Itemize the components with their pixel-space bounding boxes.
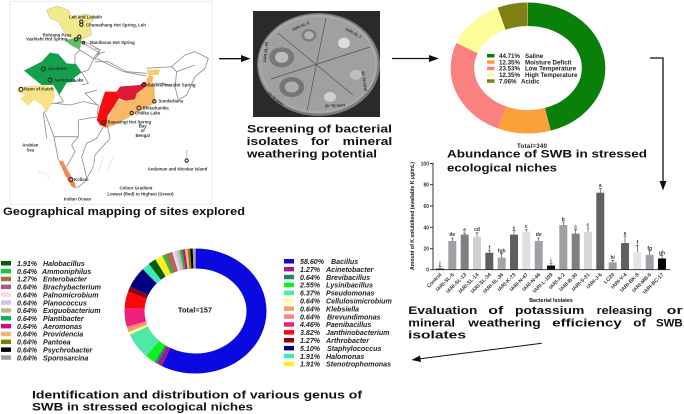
legend: genera right: 2.55% bbox=[299, 282, 321, 290]
chart: potassium solubilisation bars: IARI-SL-34 bbox=[470, 272, 493, 295]
chart: potassium solubilisation bars: c bbox=[574, 224, 577, 230]
legend: genera right: 0.64% bbox=[300, 274, 321, 282]
heading: abundance: ecological niches bbox=[447, 162, 557, 174]
panel: geographical map of India: Chilika Lake bbox=[135, 111, 161, 116]
legend: genera right: 0.64% bbox=[300, 313, 321, 321]
heading: evaluation: Evaluation bbox=[408, 305, 478, 317]
heading: evaluation: releasing bbox=[597, 305, 652, 317]
arrow: plate to donut bbox=[392, 55, 439, 62]
chart: potassium solubilisation bars: e bbox=[463, 228, 466, 234]
legend: genera left: Providencia bbox=[43, 331, 83, 339]
panel: geographical map of India: Andaman and Nicobar Island bbox=[148, 166, 208, 171]
legend: genera left: 1.91% bbox=[17, 260, 38, 268]
legend: genera left: Halobacillus bbox=[43, 260, 85, 268]
chart: potassium solubilisation bars: IARI-SL-36 bbox=[482, 272, 505, 295]
chart: potassium solubilisation bars: c bbox=[587, 222, 590, 228]
panel: geographical map of India: Sea bbox=[26, 147, 35, 152]
chart: potassium solubilisation bars: IARI-N-47 bbox=[509, 272, 530, 293]
panel: geographical map of India: Vashisht Hot Spring bbox=[26, 37, 67, 42]
panel: geographical map of India: Sundarbans bbox=[158, 99, 184, 104]
chart: potassium solubilisation bars: LC20 bbox=[603, 272, 616, 285]
chart: potassium solubilisation bars: IARI-L-109 bbox=[532, 272, 554, 295]
heading: abundance bbox=[447, 149, 647, 174]
chart: potassium solubilisation bars: IARI-SL-14 bbox=[458, 272, 480, 295]
legend: genera left: Planococcus bbox=[43, 299, 87, 307]
legend: stress niches: High Temperature bbox=[525, 72, 578, 79]
legend: genera left: Aeromonas bbox=[42, 323, 82, 331]
heading: evaluation: isolates bbox=[408, 330, 466, 342]
legend: genera right: 5.10% bbox=[300, 345, 321, 353]
legend: genera right: Bacillus bbox=[331, 258, 358, 266]
legend: genera right: 1.91% bbox=[300, 361, 321, 369]
legend: stress niches: Low Temperature bbox=[525, 66, 577, 73]
legend: genera left: 0.64% bbox=[17, 354, 38, 362]
legend: genera left: 0.64% bbox=[17, 268, 38, 276]
chart: potassium solubilisation bars: j bbox=[438, 261, 441, 267]
legend: genera right: Pseudomonas bbox=[326, 290, 375, 298]
chart: genus donut bbox=[134, 258, 256, 364]
legend: stress niches: 44.71% bbox=[499, 53, 520, 60]
heading: identification: SWB in stressed ecological niches bbox=[32, 402, 253, 414]
legend: genera right: Klebsiella bbox=[326, 305, 359, 313]
chart: potassium solubilisation bars: f bbox=[488, 246, 490, 252]
plate labels: IARI-SL-26 bbox=[360, 70, 368, 92]
legend: genera right: Halomonas bbox=[326, 353, 364, 361]
panel: geographical map of India: Kollam bbox=[74, 177, 89, 182]
legend: genera left: Exiguobacterium bbox=[43, 307, 101, 315]
east India and north-east bbox=[95, 48, 208, 129]
chart: potassium solubilisation bars: de bbox=[536, 232, 542, 238]
legend: genera right bbox=[284, 258, 393, 369]
legend: genera right: 1.27% bbox=[300, 337, 321, 345]
chart: potassium solubilisation bars: 0 bbox=[426, 268, 429, 274]
legend: genera left: Ammoniphilus bbox=[41, 268, 91, 276]
legend: genera left: 0.64% bbox=[17, 307, 38, 315]
chart: potassium solubilisation bars: 80 bbox=[423, 183, 429, 189]
chart: potassium solubilisation bars: cd bbox=[474, 227, 480, 233]
arrow: map to plate bbox=[219, 55, 250, 62]
donut total label: Total=340 bbox=[517, 143, 548, 150]
chart: potassium solubilisation bars: fgh bbox=[498, 248, 506, 254]
legend: genera right: 3.82% bbox=[300, 329, 321, 337]
chart: potassium solubilisation bars: i bbox=[550, 258, 552, 264]
legend: genera right: Brevundimonas bbox=[327, 313, 381, 321]
panel: geographical map of India: Bay bbox=[139, 123, 147, 128]
panel: geographical map of India: Rann of Kutch bbox=[24, 87, 54, 92]
legend: genera right: 1.27% bbox=[300, 266, 321, 274]
panel: geographical map of India: Colour Gradient bbox=[120, 186, 153, 191]
legend: genera left: Plantibacter bbox=[43, 315, 85, 323]
legend: genera left: 1.27% bbox=[17, 276, 38, 284]
legend: genera left: 0.64% bbox=[17, 346, 38, 354]
legend: genera left: 0.64% bbox=[17, 315, 38, 323]
legend: genera left: 0.64% bbox=[17, 323, 38, 331]
heading: evaluation: mineral bbox=[408, 318, 455, 330]
panel: petri dish photo bbox=[253, 11, 380, 117]
heading: screening bbox=[246, 124, 392, 160]
legend: genera left: 0.64% bbox=[17, 284, 38, 292]
legend: genera right: 1.91% bbox=[300, 353, 321, 361]
legend: stress niches: 23.53% bbox=[499, 66, 520, 73]
chart: potassium solubilisation bars: IARI-SL-13 bbox=[445, 272, 468, 295]
chart: potassium solubilisation bars: IARI-MB-5 bbox=[631, 272, 653, 294]
legend: genera right: 0.64% bbox=[300, 298, 321, 306]
chart: potassium solubilisation bars: IARI-J-6 bbox=[586, 272, 604, 290]
legend: stress niches: Saline bbox=[525, 53, 544, 60]
panel: geographical map of India: Bayasingi Hot Spring bbox=[107, 120, 151, 125]
chart: potassium solubilisation bars: 40 bbox=[423, 225, 429, 231]
heading: evaluation: potassium bbox=[515, 305, 585, 317]
legend: genera right: 6.37% bbox=[300, 290, 321, 298]
chart: potassium solubilisation bars: de bbox=[449, 232, 455, 238]
heading: screening: Screening of bacterial bbox=[247, 124, 392, 136]
heading: evaluation: SWB bbox=[656, 318, 683, 330]
chart: potassium solubilisation bars bbox=[410, 162, 670, 304]
heading: screening: weathering potential bbox=[246, 148, 377, 160]
chart: potassium solubilisation bars: IARI-S-31 bbox=[571, 272, 591, 293]
legend: genera right: Staphylococcus bbox=[327, 345, 381, 353]
legend: genera right: 0.64% bbox=[300, 305, 321, 313]
chart: abundance donut bbox=[462, 14, 594, 122]
plate labels: IARI-SL-25 bbox=[262, 41, 269, 62]
legend: genera right: 4.46% bbox=[299, 321, 321, 329]
legend: genera right: Cellulosimicrobium bbox=[326, 298, 393, 306]
panel: geographical map of India: Bhitarkanika bbox=[143, 106, 169, 111]
heading: evaluation: of bbox=[488, 305, 504, 317]
legend: stress niches: 7.06% bbox=[499, 78, 517, 85]
plate labels: IARI-SL-27 bbox=[265, 90, 285, 107]
y axis title: Amount of K solubilised (available K µg/mL) bbox=[410, 162, 416, 270]
chart: potassium solubilisation bars: 100 bbox=[421, 162, 429, 168]
legend: genera right: Brevibacillus bbox=[326, 274, 370, 282]
panel: geographical map of India: Jaisalmer bbox=[47, 66, 68, 71]
heading: evaluation: or bbox=[667, 305, 684, 317]
heading: evaluation bbox=[408, 305, 684, 342]
legend: genera left: 0.64% bbox=[17, 331, 38, 339]
panel: geographical map of India: of bbox=[141, 128, 145, 133]
plate labels: IARI-SL-3 bbox=[291, 20, 311, 32]
chart: potassium solubilisation bars: c bbox=[525, 224, 528, 230]
legend: stress niches: 12.35% bbox=[499, 59, 520, 66]
legend: genera left: 0.64% bbox=[17, 339, 38, 347]
chart: potassium solubilisation bars: IARI-BC-17 bbox=[642, 272, 665, 296]
heading: screening: for bbox=[311, 136, 330, 148]
panel: geographical map of India: Indian Ocean bbox=[64, 196, 92, 201]
chart: potassium solubilisation bars: hi bbox=[610, 255, 616, 261]
legend: genera left: Pantoea bbox=[43, 339, 71, 347]
panel: geographical map of India: Rohtang Pass bbox=[43, 32, 72, 37]
plate labels: IARI-SL-42 bbox=[324, 103, 345, 109]
panel: geographical map of India: Manikaran Hot Spring bbox=[90, 40, 135, 45]
heading: screening: isolates bbox=[247, 136, 298, 148]
panel: geographical map of India: Arabian bbox=[22, 142, 39, 147]
heading: evaluation: weathering bbox=[467, 318, 541, 330]
arrow: bar chart to genus donut bbox=[412, 343, 542, 362]
chart: potassium solubilisation bars: b bbox=[562, 217, 565, 223]
chart: potassium solubilisation bars: IARI-A-2 bbox=[548, 272, 567, 291]
panel: geographical map of India: Leh and Ladakh bbox=[69, 14, 102, 19]
chart: potassium solubilisation bars: Control bbox=[426, 272, 444, 289]
legend: genera left: Psychrobacter bbox=[43, 346, 94, 354]
legend: genera left: Sporosarcina bbox=[43, 354, 88, 362]
legend: genera right: Janthinobacterium bbox=[326, 329, 390, 337]
chart: potassium solubilisation bars: 60 bbox=[423, 204, 429, 210]
legend: genera left: 0.64% bbox=[17, 291, 38, 299]
legend: stress niches bbox=[487, 53, 578, 85]
legend: genera left: 0.64% bbox=[17, 299, 38, 307]
legend: genera left: Brachybacterium bbox=[43, 284, 102, 292]
legend: stress niches: Acidic bbox=[521, 78, 540, 85]
chart: potassium solubilisation bars: IARI-B-30 bbox=[558, 272, 579, 293]
legend: genera right: Lysinibacillus bbox=[326, 282, 373, 290]
chart: potassium solubilisation bars: IARI-K-73 bbox=[497, 272, 517, 293]
chart: potassium solubilisation bars: f bbox=[636, 240, 638, 246]
west and central India bbox=[17, 40, 105, 138]
heading: identification: Identification and distribution of various genus of bbox=[32, 389, 362, 401]
legend: genera right: Stenotrophomonas bbox=[326, 361, 391, 369]
panel: geographical map of India: Lowest (Red) to Highest (Green) bbox=[107, 191, 174, 196]
donut total label: Total=157 bbox=[178, 306, 212, 315]
legend: stress niches: 12.35% bbox=[499, 72, 520, 79]
panel: geographical map of India bbox=[10, 1, 212, 204]
chart: potassium solubilisation bars: IARI-N-46 bbox=[521, 272, 542, 293]
south India bbox=[38, 113, 113, 188]
north India fills and lines bbox=[47, 6, 147, 76]
legend: genera left: Palnomicrobium bbox=[43, 291, 99, 299]
legend: genera right: Arthrobacter bbox=[325, 337, 370, 345]
chart: potassium solubilisation bars: c bbox=[513, 226, 516, 232]
colony zones bbox=[269, 29, 362, 102]
heading: evaluation: of bbox=[633, 318, 646, 330]
panel: geographical map of India: Bengal bbox=[135, 133, 150, 138]
chart: potassium solubilisation bars: gh bbox=[659, 250, 665, 256]
chart: potassium solubilisation bars: 20 bbox=[423, 247, 429, 253]
chart: potassium solubilisation bars: Bacterial Isolates bbox=[529, 298, 573, 304]
chart: potassium solubilisation bars: e bbox=[624, 231, 627, 237]
legend: genera right: Paenibacillus bbox=[326, 321, 371, 329]
panel: geographical map of India: Sambhar Lake bbox=[54, 78, 84, 83]
chart: potassium solubilisation bars: IARI-V-4 bbox=[610, 272, 628, 290]
chart: potassium solubilisation bars: a bbox=[599, 183, 602, 189]
chart: potassium solubilisation bars: fg bbox=[647, 246, 652, 252]
legend: stress niches: Moisture Deficit bbox=[525, 59, 571, 66]
heading: identification bbox=[32, 389, 362, 414]
axes bbox=[430, 163, 670, 270]
heading: screening: mineral bbox=[343, 136, 392, 148]
panel: geographical map of India: Bakreshwar Hot Spring bbox=[148, 82, 196, 87]
chart: potassium solubilisation bars: IARI-BK-9 bbox=[619, 272, 641, 294]
heading: geographical mapping: Geographical mapping of sites explored bbox=[3, 206, 245, 218]
heading: evaluation: efficiency bbox=[552, 318, 623, 330]
legend: genera left bbox=[1, 260, 102, 362]
panel: geographical map of India: Chumathang Hot Spring, Leh bbox=[86, 22, 146, 27]
arrow: donut to bar chart bbox=[650, 58, 666, 190]
legend: genera right: Acinetobacter bbox=[325, 266, 375, 274]
legend: genera left: Enterobacter bbox=[43, 276, 88, 284]
chart: potassium solubilisation bars: IARI-SL-6 bbox=[435, 272, 456, 293]
legend: genera right: 58.60% bbox=[300, 258, 325, 266]
plate labels: IARI-SL-7 bbox=[345, 26, 363, 40]
heading: abundance: Abundance of SWB in stressed bbox=[447, 149, 647, 161]
plate labels bbox=[262, 20, 368, 109]
